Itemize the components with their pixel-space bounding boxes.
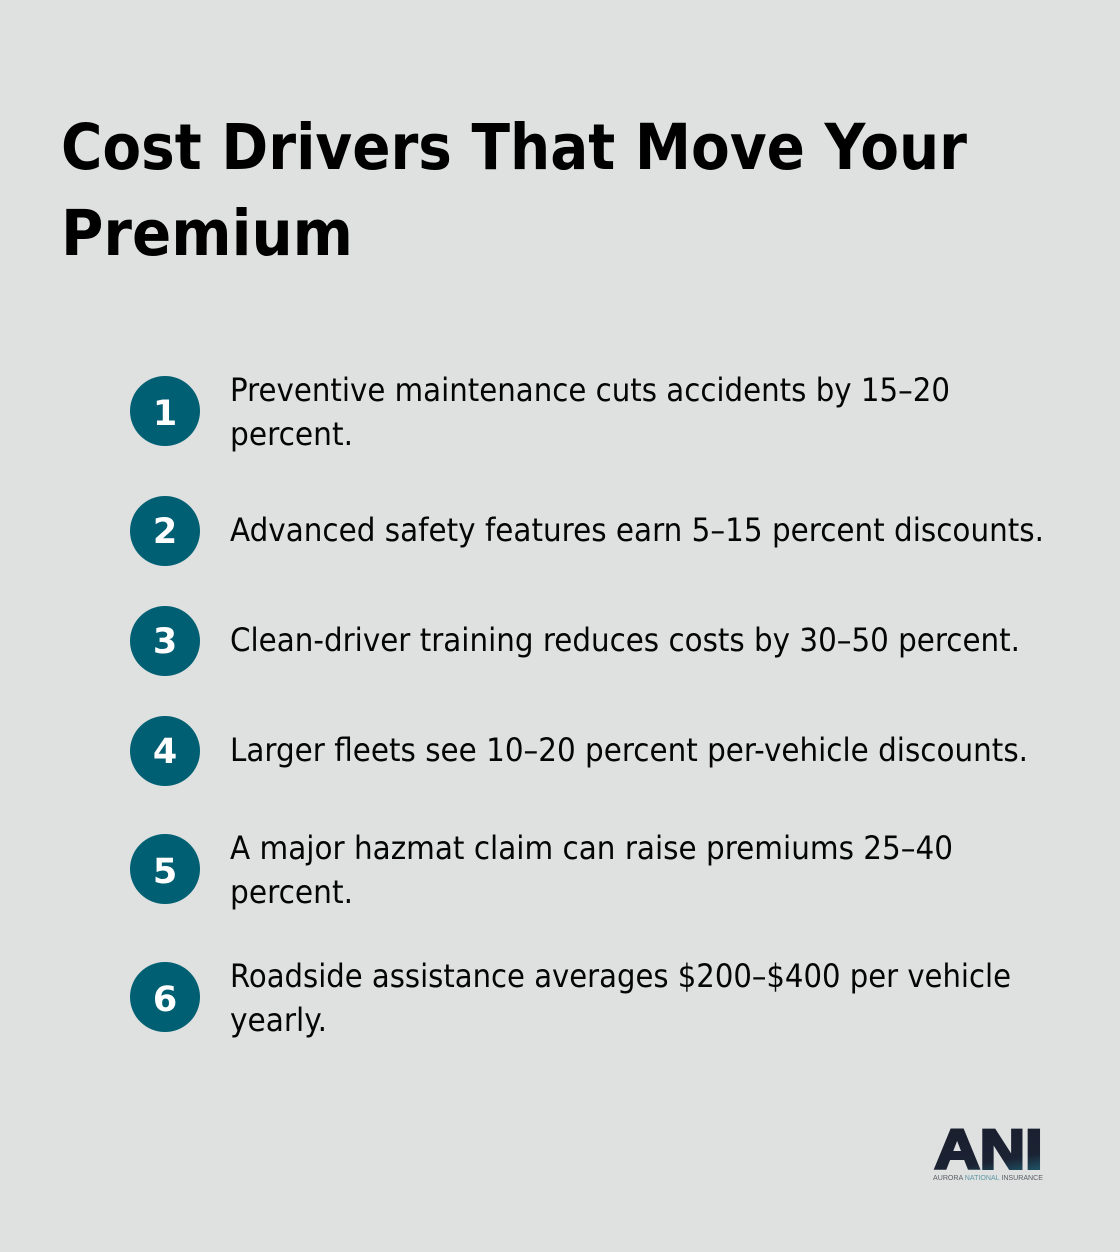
- item 2: 2: [153, 512, 177, 552]
- item 3: Clean-driver training reduces costs by 30–50 percent.: [230, 621, 1020, 659]
- title: [61, 110, 968, 270]
- item 4: 4: [153, 732, 177, 772]
- item 3: 3: [153, 622, 177, 662]
- item 5: 5: [153, 852, 177, 892]
- item 5: A major hazmat claim can raise premiums 25–40: [230, 829, 953, 867]
- item 5: [130, 829, 953, 911]
- item 2: Advanced safety features earn 5–15 percent discounts.: [230, 511, 1044, 549]
- item 6: 6: [153, 980, 177, 1020]
- item 6: yearly.: [230, 1001, 327, 1039]
- item 4: Larger fleets see 10–20 percent per-vehicle discounts.: [230, 731, 1028, 769]
- logo: Aurora National Insurance: ANI: [934, 1118, 1042, 1180]
- title: Cost Drivers That Move Your: [61, 110, 968, 184]
- item 4: [130, 716, 1028, 786]
- item 6: Roadside assistance averages $200–$400 per vehicle: [230, 957, 1011, 995]
- logo: Aurora National Insurance: AURORA NATIONAL INSURANCE: [933, 1175, 1043, 1182]
- item 2: [130, 496, 1044, 566]
- item 1: Preventive maintenance cuts accidents by 15–20: [230, 371, 950, 409]
- title: Premium: [61, 196, 353, 270]
- item 1: percent.: [230, 415, 353, 453]
- item 1: 1: [153, 394, 177, 434]
- item 3: [130, 606, 1020, 676]
- item 1: [130, 371, 950, 453]
- list of cost drivers: [130, 371, 1044, 1039]
- item 5: percent.: [230, 873, 353, 911]
- item 6: [130, 957, 1011, 1039]
